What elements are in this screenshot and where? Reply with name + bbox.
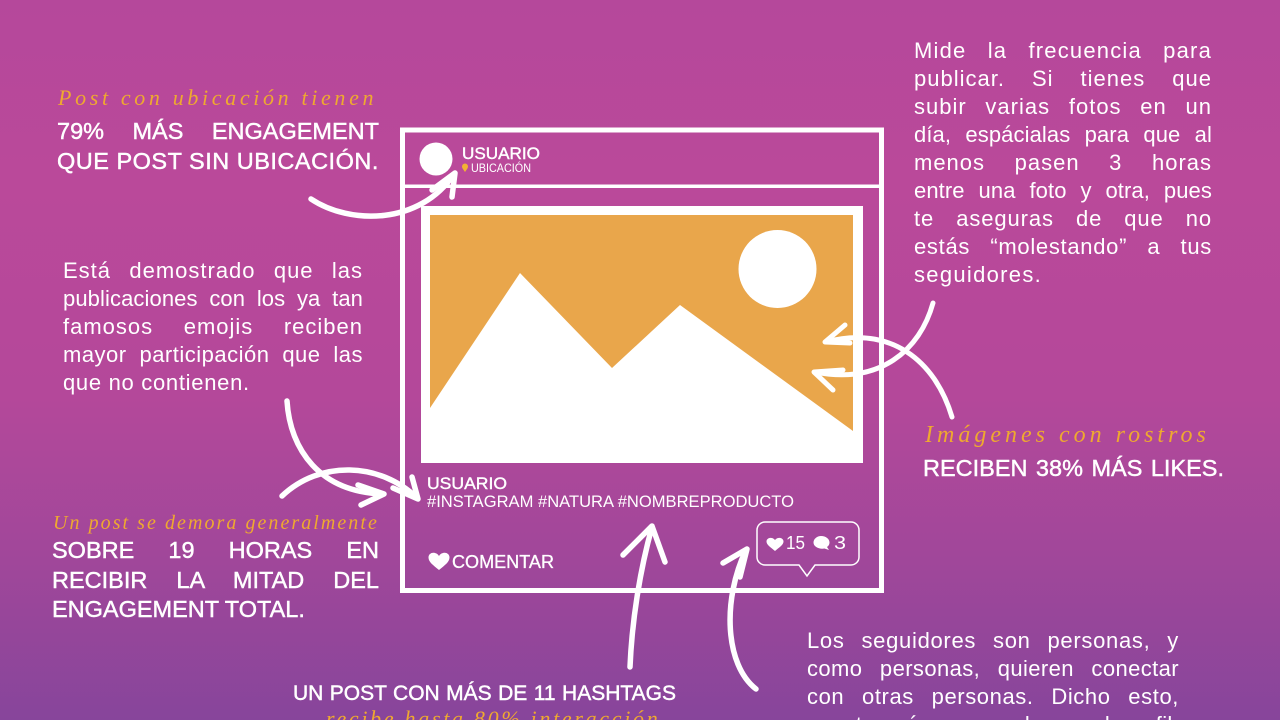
arrow: to caption from emojis — [287, 401, 384, 505]
post header: avatar and user — [420, 142, 540, 176]
text block: posting frequency: seguidores. — [914, 262, 1042, 287]
arrow: to hashtags — [623, 526, 665, 667]
arrow: to likes — [723, 549, 756, 689]
callout: location script heading: Post con ubicación tienen — [58, 85, 377, 110]
callout: location statistic — [57, 118, 379, 174]
arrow: frequency to image — [814, 303, 933, 390]
arrow: to caption from timing — [282, 470, 418, 499]
text block: emojis: Está demostrado que las — [63, 258, 363, 283]
text block: emojis: famosos emojis reciben — [63, 314, 363, 339]
callout: timing statistic: RECIBIR LA MITAD DEL — [52, 566, 379, 592]
callout: timing statistic — [52, 537, 379, 622]
text block: posting frequency: menos pasen 3 horas — [914, 150, 1212, 175]
comment action: COMENTAR — [452, 552, 554, 572]
post header: avatar and user: USUARIO — [462, 145, 540, 163]
text block: personal connection: con otras personas. Dicho esto, — [807, 684, 1179, 709]
text block: posting frequency — [914, 38, 1212, 287]
post image — [421, 206, 863, 463]
callout: hashtags statistic: UN POST CON MÁS DE 11 HASHTAGS — [293, 682, 676, 705]
post caption: USUARIO — [427, 474, 507, 493]
text block: posting frequency: estás “molestando” a tus — [914, 234, 1212, 259]
text block: personal connection: como personas, quieren conectar — [807, 656, 1179, 681]
instagram post frame — [402, 130, 882, 590]
likes and comments bubble: 3 — [834, 533, 846, 553]
callout: location statistic: 79% MÁS ENGAGEMENT — [57, 118, 379, 144]
callout: faces statistic: RECIBEN 38% MÁS LIKES. — [923, 455, 1224, 481]
likes and comments bubble — [757, 522, 859, 576]
callout: timing script heading: Un post se demora generalmente — [53, 512, 379, 534]
text block: posting frequency: te aseguras de que no — [914, 206, 1212, 231]
text block: posting frequency: Mide la frecuencia para — [914, 38, 1212, 63]
arrow: to location — [311, 173, 455, 216]
text block: emojis: que no contienen. — [63, 370, 250, 395]
callout: location statistic: QUE POST SIN UBICACIÓN. — [57, 148, 379, 174]
post caption — [427, 474, 794, 511]
text block: emojis: publicaciones con los ya tan — [63, 286, 363, 311]
text block: posting frequency: entre una foto y otra, pues — [914, 178, 1212, 203]
text block: personal connection — [807, 628, 1179, 720]
likes and comments bubble: 15 — [786, 533, 805, 553]
text block: posting frequency: subir varias fotos en un — [914, 94, 1212, 119]
callout: timing statistic: SOBRE 19 HORAS EN — [52, 537, 379, 563]
arrow: faces to image — [825, 325, 952, 417]
text block: emojis: mayor participación que las — [63, 342, 363, 367]
callout: faces script heading: Imágenes con rostros — [925, 422, 1210, 448]
callout: timing statistic: ENGAGEMENT TOTAL. — [52, 596, 305, 622]
post header: avatar and user: UBICACIÓN — [471, 162, 531, 175]
post caption: #INSTAGRAM #NATURA #NOMBREPRODUCTO — [427, 492, 794, 511]
text block: personal connection: Los seguidores son personas, y — [807, 628, 1179, 653]
text block: emojis — [63, 258, 363, 395]
text block: posting frequency: publicar. Si tienes que — [914, 66, 1212, 91]
text block: posting frequency: día, espácialas para que al — [914, 122, 1212, 147]
